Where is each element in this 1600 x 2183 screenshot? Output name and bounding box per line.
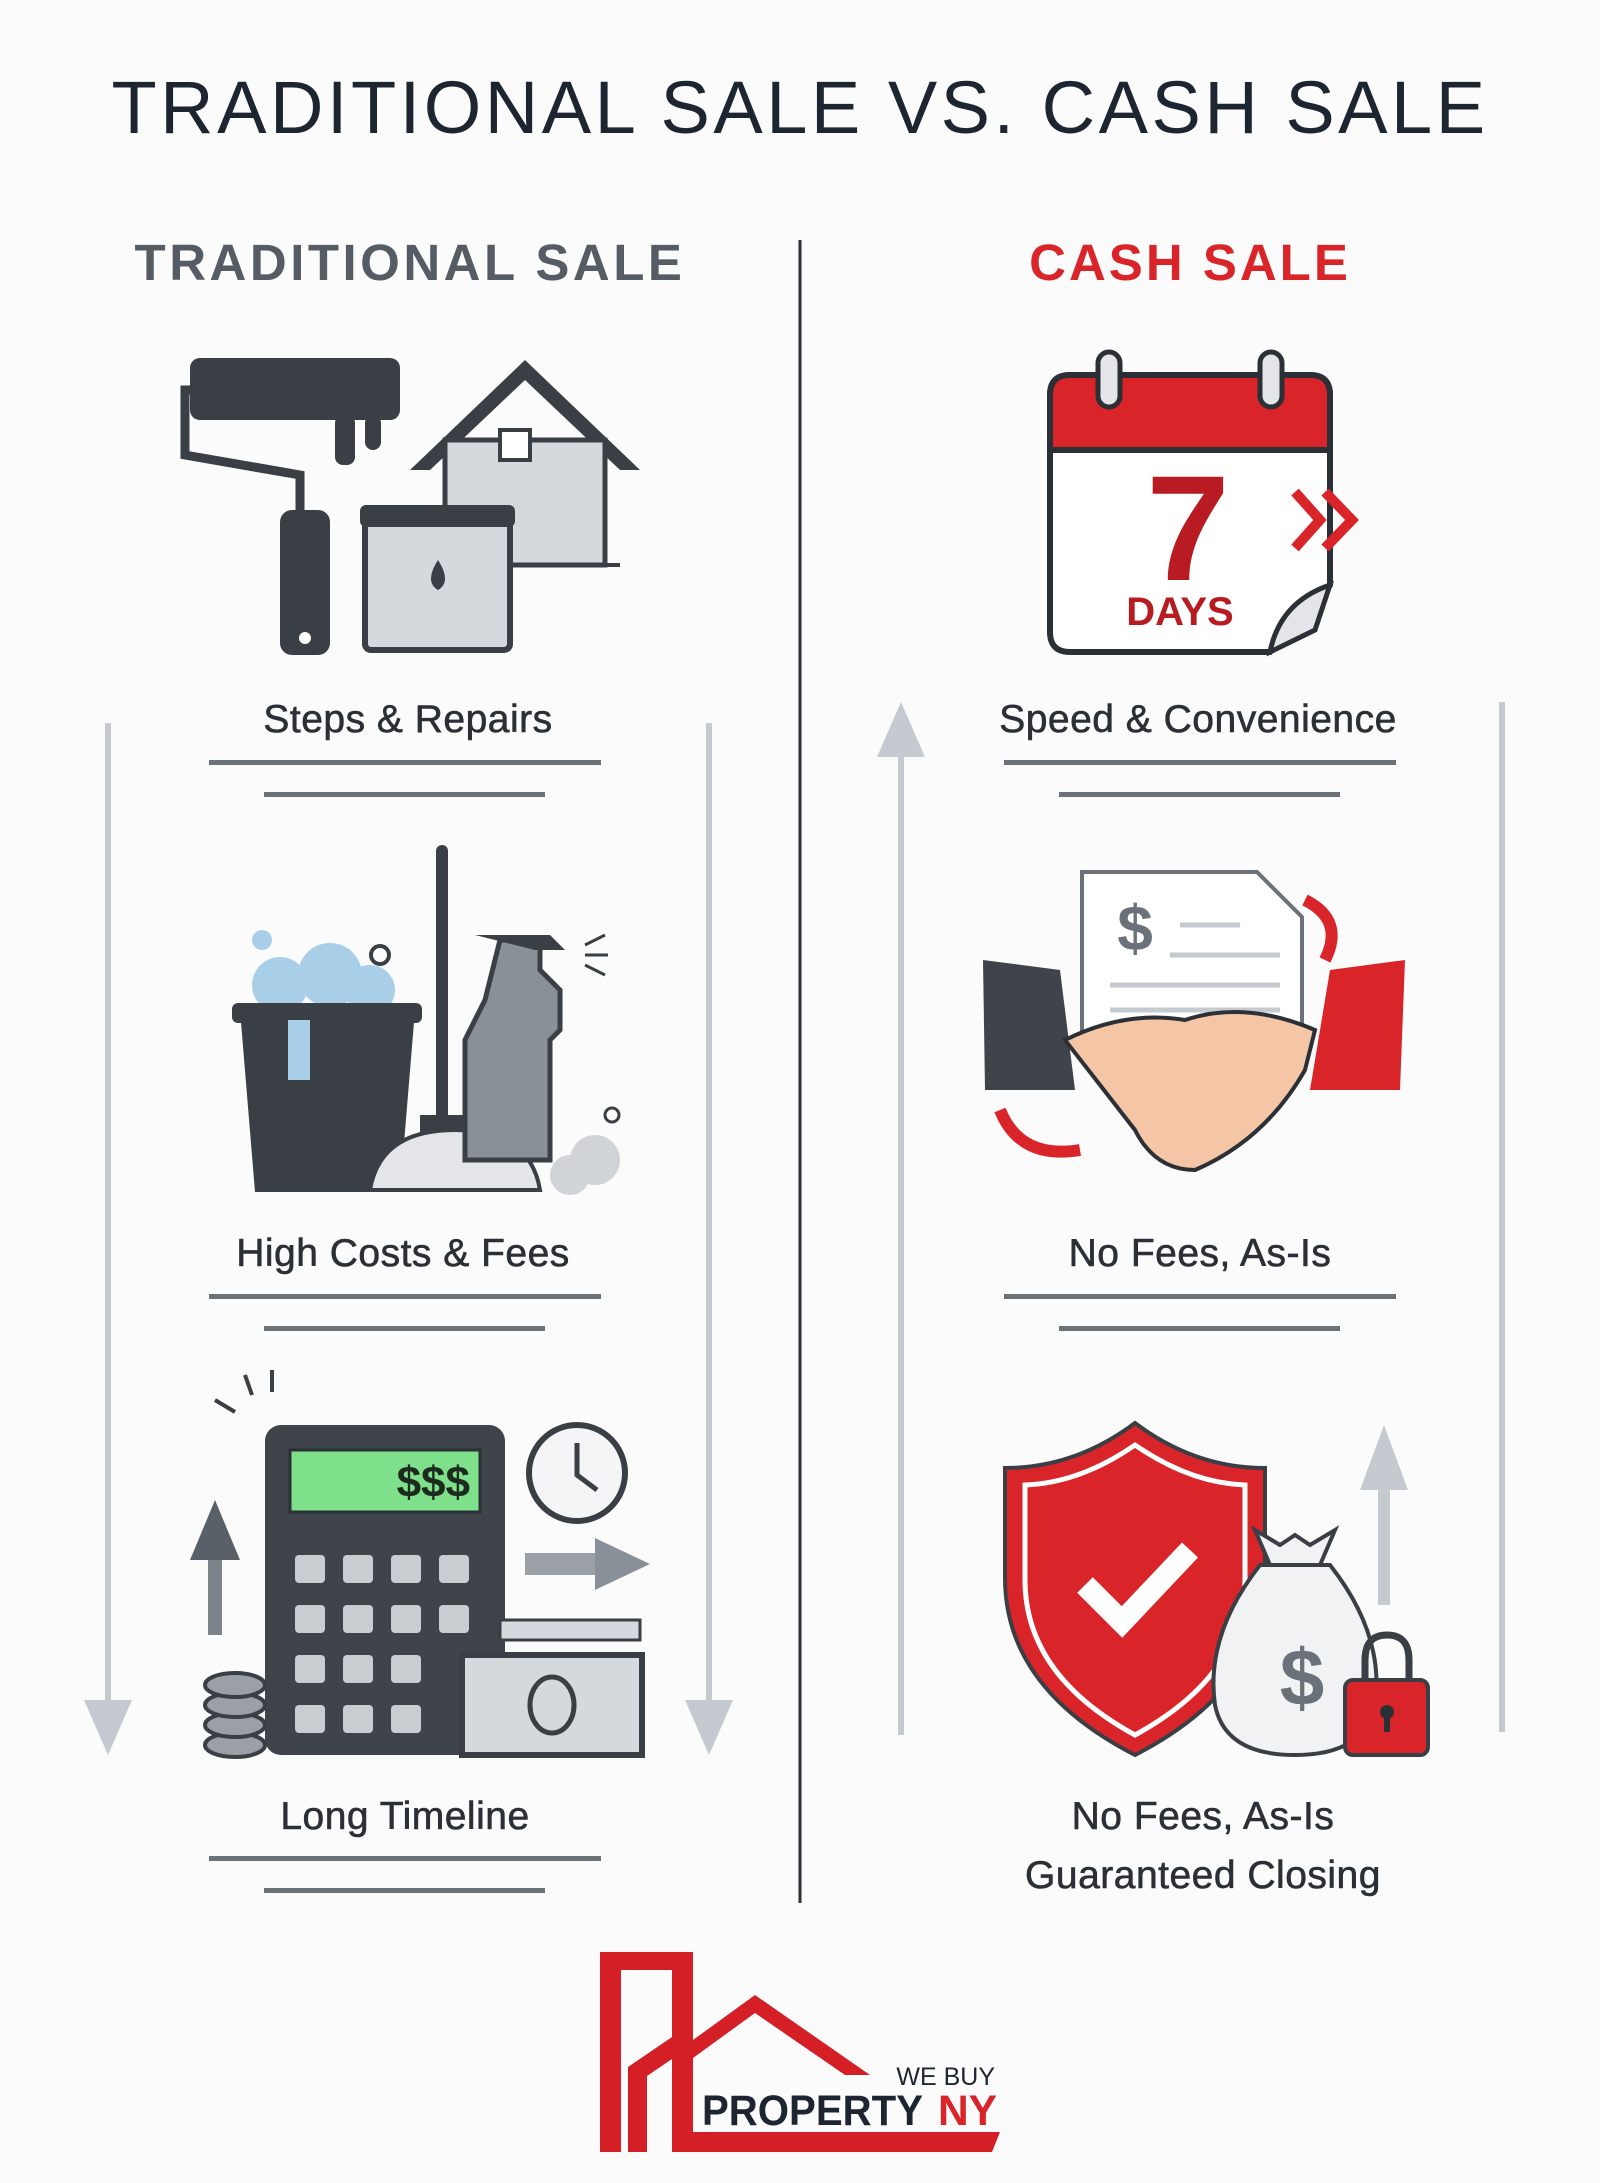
label: steps & repairs: Steps & Repairs	[263, 698, 553, 741]
label: no fees, as-is: No Fees, As-Is	[1069, 1232, 1331, 1275]
arrow: left inner down	[685, 723, 733, 1755]
label: speed & convenience: Speed & Convenience	[999, 698, 1397, 741]
icon: handshake with contract	[983, 872, 1405, 1170]
icon: calendar 7 days: 7	[1146, 444, 1230, 612]
icon: calendar 7 days	[1050, 352, 1352, 652]
arrow: left outer down	[84, 723, 132, 1755]
icon: cleaning supplies	[232, 845, 620, 1195]
heading: traditional sale: TRADITIONAL SALE	[135, 234, 685, 291]
icon: shield, money bag, lock: $	[1280, 1633, 1324, 1722]
label: long timeline: Long Timeline	[280, 1795, 530, 1838]
logo: we buy property ny: PROPERTY	[702, 2087, 923, 2135]
heading: cash sale: CASH SALE	[1029, 234, 1351, 291]
logo: we buy property ny	[600, 1952, 1000, 2152]
label: high costs & fees: High Costs & Fees	[236, 1232, 570, 1275]
icon: calculator and money: $$$	[397, 1458, 470, 1507]
label: no fees guaranteed closing	[1025, 1795, 1381, 1897]
logo: we buy property ny: NY	[938, 2087, 997, 2135]
arrow: right outer line	[1499, 702, 1505, 1732]
logo: we buy property ny: WE BUY	[896, 2063, 995, 2091]
label: no fees guaranteed closing: No Fees, As-Is	[1072, 1795, 1334, 1838]
icon: shield, money bag, lock	[1005, 1423, 1428, 1755]
icon: handshake with contract: $	[1117, 892, 1153, 964]
title: TRADITIONAL SALE VS. CASH SALE	[111, 66, 1489, 149]
icon: paint roller and house	[185, 358, 640, 655]
arrow: right inner up	[877, 702, 925, 1735]
icon: calculator and money	[190, 1370, 650, 1757]
icon: calendar 7 days: DAYS	[1126, 590, 1234, 634]
label: no fees guaranteed closing: Guaranteed Closing	[1025, 1854, 1381, 1897]
